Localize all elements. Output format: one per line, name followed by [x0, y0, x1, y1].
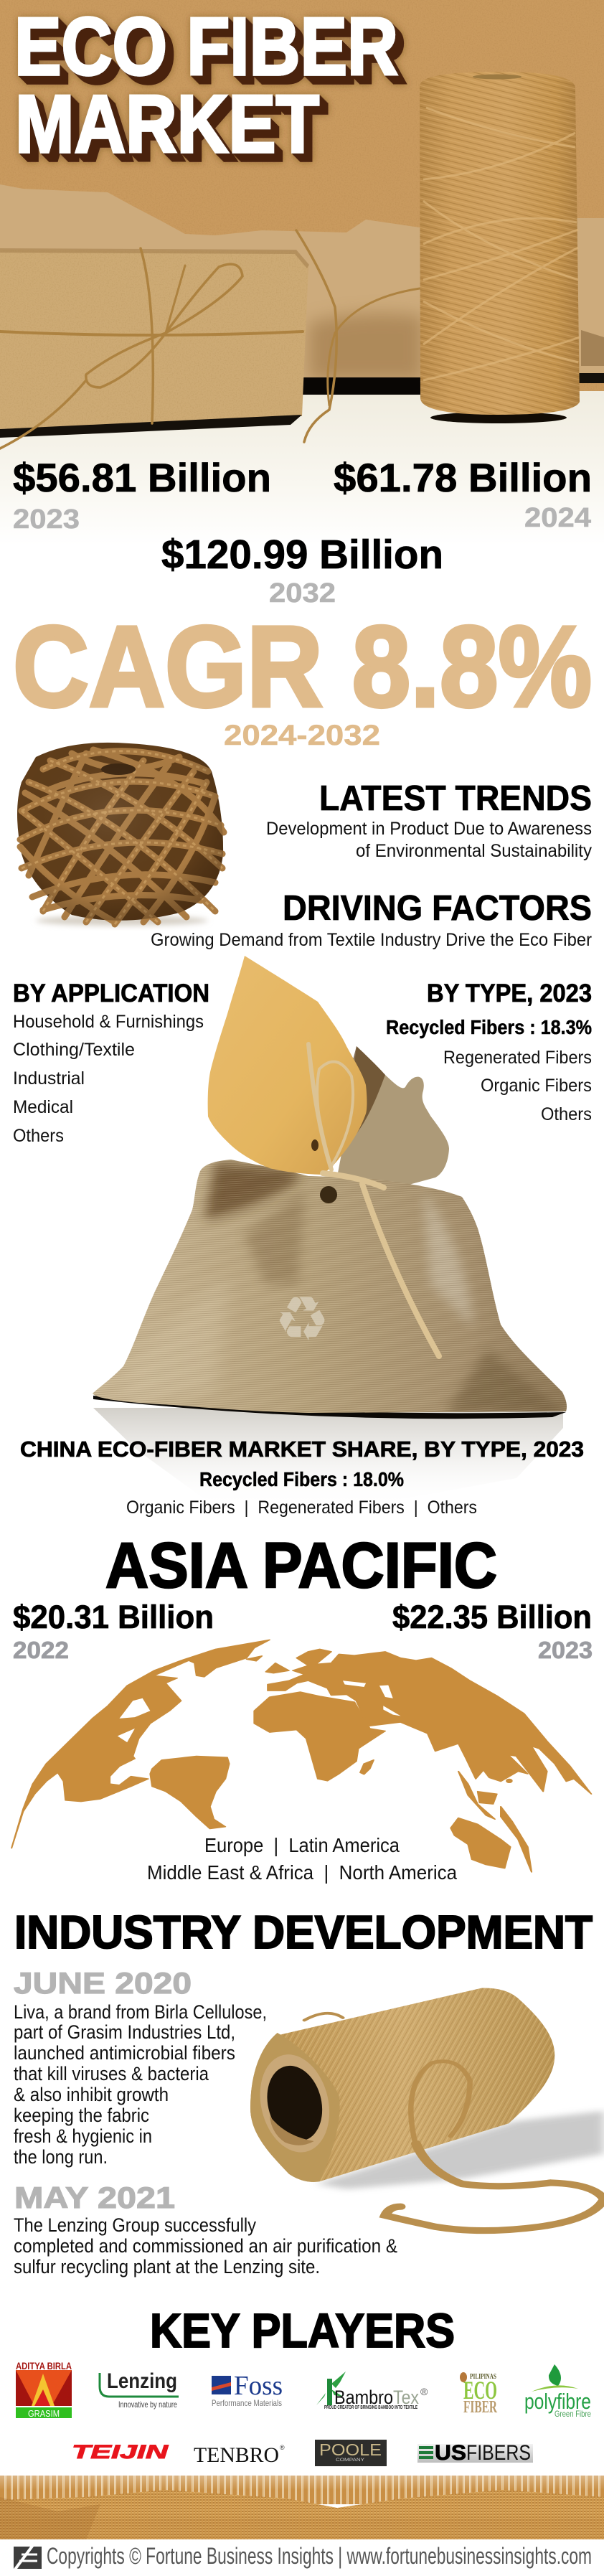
- market size 2023: $56.81 Billion: [13, 455, 271, 500]
- development June 2020: & also inhibit growth: [14, 2084, 169, 2105]
- logo: BambroTex: PROUD CREATOR OF BRINGING BAMBOO INTO TEXTILE: [324, 2405, 417, 2410]
- logo: Poole Company: COMPANY: [336, 2458, 364, 2463]
- by application list: [13, 979, 209, 1146]
- sack reflection: [93, 1408, 563, 1507]
- icon: twine spool: [420, 72, 580, 423]
- logo: Aditya Birla Grasim: ADITYA BIRLA: [16, 2360, 72, 2371]
- logo: US Fibers: US: [435, 2441, 466, 2465]
- torn paper backdrop: [0, 184, 604, 402]
- by application list: Industrial: [13, 1068, 85, 1089]
- other regions: [147, 1834, 457, 1884]
- by type list: [386, 979, 592, 1124]
- market size 2023: [13, 455, 271, 535]
- latest trends: Development in Product Due to Awareness: [266, 819, 592, 839]
- United Kingdom: [266, 1663, 289, 1673]
- logo: Lenzing: [100, 2369, 179, 2410]
- development June 2020: [14, 1966, 267, 2168]
- logo: US Fibers: FIBERS: [466, 2441, 531, 2465]
- china market share: Organic Fibers | Regenerated Fibers | Others: [126, 1498, 477, 1518]
- logo: Lenzing: Innovative by nature: [118, 2399, 177, 2410]
- market size 2024: [334, 455, 592, 533]
- china market share: [20, 1437, 584, 1518]
- logo: Teijin: TEIJIN: [72, 2441, 169, 2463]
- other regions: Middle East & Africa | North America: [147, 1861, 457, 1884]
- logo: Foss: Foss: [234, 2371, 283, 2401]
- CAGR: 2024-2032: [224, 720, 380, 751]
- front parcel: [0, 250, 308, 429]
- market size 2032: $120.99 Billion: [161, 532, 443, 578]
- logo: BambroTex: ®: [420, 2386, 428, 2397]
- by application list: Household & Furnishings: [13, 1012, 204, 1032]
- logo: Tenbro: ®: [280, 2444, 285, 2451]
- North America and Greenland: [11, 1640, 270, 1848]
- logo: Aditya Birla Grasim: [16, 2360, 72, 2419]
- Australia: [450, 1818, 511, 1868]
- Madagascar: [360, 1760, 374, 1774]
- market size 2032: 2032: [269, 578, 336, 608]
- logo: Pilipinas Eco Fiber: ECO: [463, 2376, 497, 2405]
- footer: Fortune Business Insights logo: [14, 2547, 42, 2569]
- icon: recycling symbol: ♻: [274, 1284, 330, 1355]
- sack back fold: [337, 1046, 449, 1191]
- industry development heading: INDUSTRY DEVELOPMENT: [14, 1906, 593, 1958]
- driving factors: Growing Demand from Textile Industry Drive the Eco Fiber: [151, 930, 592, 950]
- development June 2020: JUNE 2020: [14, 1966, 192, 2000]
- sack body: [93, 1160, 567, 1413]
- region heading: ASIA PACIFIC: [105, 1529, 497, 1601]
- development June 2020: keeping the fabric: [14, 2105, 149, 2126]
- region value 2022: $20.31 Billion: [13, 1599, 214, 1635]
- title: [14, 1, 398, 170]
- region value 2023: $22.35 Billion: [392, 1599, 592, 1635]
- logo: Lenzing: Lenzing: [107, 2369, 177, 2393]
- Eurasia: [268, 1649, 591, 1794]
- logo: BambroTex: [316, 2371, 428, 2410]
- china market share: Recycled Fibers : 18.0%: [199, 1468, 404, 1490]
- parcel twine: [0, 230, 420, 448]
- logo: Tenbro: TENBRO: [194, 2443, 279, 2467]
- development May 2021: sulfur recycling plant at the Lenzing site.: [14, 2256, 320, 2277]
- logo: Poole Company: [315, 2440, 387, 2466]
- icon: spool of twine with loose tail: [250, 1988, 604, 2231]
- logo: Pilipinas Eco Fiber: FIBER: [463, 2398, 497, 2417]
- development June 2020: part of Grasim Industries Ltd,: [14, 2021, 235, 2043]
- development June 2020: the long run.: [14, 2146, 108, 2168]
- latest trends: [266, 779, 592, 861]
- Southeast Asia islands: [458, 1772, 495, 1819]
- by application list: BY APPLICATION: [13, 979, 209, 1007]
- market size 2023: 2023: [13, 504, 80, 535]
- by type list: Regenerated Fibers: [443, 1048, 592, 1068]
- region value 2022: 2022: [13, 1637, 69, 1663]
- by application list: Others: [13, 1126, 64, 1146]
- paper tag: [208, 956, 367, 1175]
- key players heading: KEY PLAYERS: [150, 2304, 455, 2358]
- logo: polyfibre: Green Fibre: [555, 2409, 591, 2419]
- latest trends: LATEST TRENDS: [319, 779, 592, 818]
- logo: Foss: Performance Materials: [212, 2398, 282, 2408]
- logo: Poole Company: POOLE: [319, 2440, 382, 2459]
- world map: [11, 1640, 591, 1872]
- development May 2021: The Lenzing Group successfully: [14, 2214, 256, 2236]
- logo: BambroTex: Bambro: [334, 2387, 393, 2408]
- other regions: Europe | Latin America: [204, 1834, 400, 1856]
- icon: burlap sack with paper tag: [93, 956, 567, 1507]
- logo: Aditya Birla Grasim: GRASIM: [28, 2408, 60, 2419]
- driving factors: [151, 889, 592, 950]
- development June 2020: Liva, a brand from Birla Cellulose,: [14, 2001, 267, 2023]
- icon: ball of jute twine: [17, 743, 224, 926]
- logo: Foss: [212, 2371, 283, 2408]
- twine knot and tail: [308, 1044, 439, 1356]
- region value 2023: [392, 1599, 593, 1663]
- logo: polyfibre: [524, 2364, 591, 2419]
- development June 2020: fresh & hygienic in: [14, 2125, 152, 2147]
- logo: BambroTex: Tex: [393, 2387, 419, 2408]
- market size 2024: $61.78 Billion: [334, 455, 592, 500]
- by application list: Medical: [13, 1097, 73, 1117]
- development June 2020: that kill viruses & bacteria: [14, 2063, 209, 2084]
- by type list: Others: [541, 1104, 592, 1124]
- logo: Pilipinas Eco Fiber: [460, 2372, 497, 2417]
- latest trends: of Environmental Sustainability: [356, 841, 592, 861]
- panel: hero photo of kraft paper parcels and twine spool: [0, 0, 604, 545]
- title: ECO FIBER: [14, 1, 398, 93]
- by type list: Organic Fibers: [481, 1076, 592, 1096]
- driving factors: DRIVING FACTORS: [283, 889, 592, 928]
- by application list: Clothing/Textile: [13, 1040, 135, 1060]
- logo: US Fibers: [417, 2441, 533, 2465]
- region value 2022: [13, 1599, 214, 1663]
- market size 2032: [161, 532, 443, 608]
- title: MARKET: [15, 79, 319, 170]
- burlap band: [0, 2476, 604, 2539]
- market size 2024: 2024: [524, 503, 591, 533]
- development May 2021: completed and commissioned an air purification &: [14, 2235, 397, 2257]
- china market share: CHINA ECO-FIBER MARKET SHARE, BY TYPE, 2023: [20, 1437, 584, 1462]
- development May 2021: MAY 2021: [14, 2181, 175, 2214]
- logo: Pilipinas Eco Fiber: PILIPINAS: [470, 2372, 496, 2381]
- by type list: BY TYPE, 2023: [427, 979, 592, 1007]
- Africa: [254, 1692, 385, 1781]
- South America: [150, 1756, 230, 1829]
- development June 2020: launched antimicrobial fibers: [14, 2042, 235, 2064]
- development May 2021: [14, 2181, 397, 2277]
- region value 2023: 2023: [538, 1637, 593, 1663]
